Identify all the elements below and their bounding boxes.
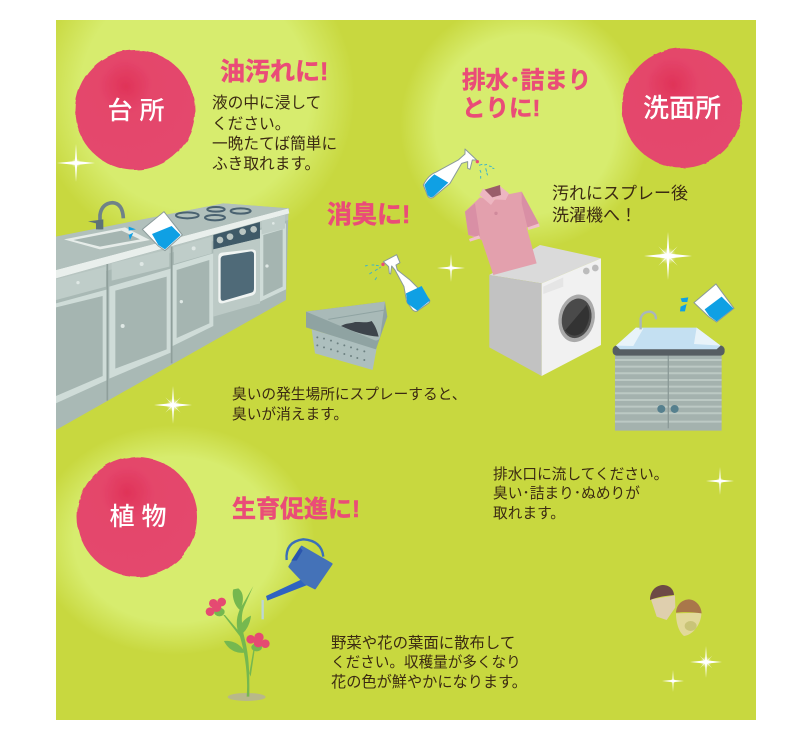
text: drain: 臭い･詰まり･ぬめりが: [493, 485, 640, 502]
text: grease: ふき取れます。: [212, 155, 320, 173]
faucet: [100, 203, 123, 229]
background glows: [35, 0, 650, 655]
text: growth: 野菜や花の葉面に散布して: [331, 634, 515, 652]
badge: kitchen: 台 所: [108, 97, 164, 125]
text: growth: ください。収穫量が多くなり: [331, 653, 521, 671]
illustration: acorns: [650, 585, 702, 636]
sparkles: [57, 144, 734, 692]
heading: grease: 油汚れに!: [220, 58, 328, 86]
heading: deodorize: 消臭に!: [327, 201, 410, 229]
badge: plants: [77, 457, 197, 577]
text: laundry: 洗濯機へ！: [552, 206, 637, 225]
lower doors: [56, 289, 107, 403]
sink cabinet: [613, 284, 734, 431]
spray bottle: lower: [365, 255, 430, 311]
illustration: plant and watering can: [206, 539, 332, 701]
text: deodorize: 臭いの発生場所にスプレーすると、: [232, 386, 466, 403]
text: drain: 取れます。: [493, 505, 565, 522]
oven: [213, 222, 260, 249]
text: drain: 排水口に流してください。: [493, 466, 668, 483]
badge: washroom: [622, 48, 742, 168]
cup: [694, 284, 734, 322]
washing machine: [489, 245, 601, 376]
badge: kitchen: [75, 50, 195, 170]
badge: washroom: 洗面所: [643, 93, 721, 123]
burners: [176, 207, 251, 220]
text: growth: 花の色が鮮やかになります。: [331, 674, 527, 691]
spray bottle: top: [423, 149, 494, 198]
illustrations: washer, sink: [489, 245, 734, 431]
measuring cup: [142, 212, 182, 251]
heading: drains: 排水･詰まり: [462, 67, 591, 93]
heading: drains: とりに!: [462, 95, 540, 121]
shirt: [465, 185, 540, 275]
sink strainer: [306, 302, 387, 370]
drawers: [56, 267, 106, 300]
text: laundry: 汚れにスプレー後: [552, 184, 688, 203]
badge: plants: 植 物: [110, 503, 166, 531]
text: grease: ください。: [212, 115, 290, 133]
knobs: [76, 222, 275, 328]
text: grease: 液の中に浸して: [212, 94, 321, 112]
text: grease: 一晩たてば簡単に: [212, 135, 337, 153]
heading: growth: 生育促進に!: [232, 496, 360, 523]
text: deodorize: 臭いが消えます。: [232, 406, 348, 423]
illustration: kitchen: [56, 203, 289, 430]
